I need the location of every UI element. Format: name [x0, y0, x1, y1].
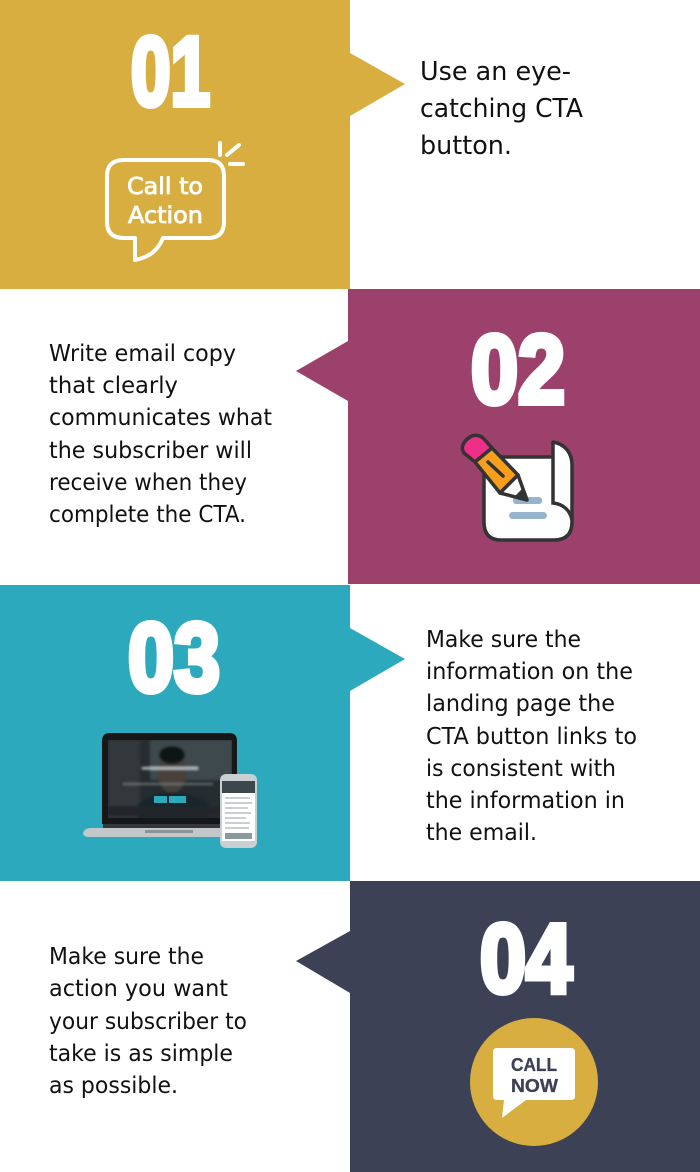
text: step 2 copy: the subscriber will	[49, 436, 252, 464]
text: step 3 copy	[426, 625, 637, 846]
panel background with pointer	[296, 289, 700, 584]
panel background with pointer	[0, 585, 405, 881]
text: step 3 copy: CTA button links to	[426, 722, 637, 750]
icon: call now badge	[470, 1018, 598, 1146]
text: step 3 copy: the information in	[426, 786, 625, 814]
text: step 1 copy: Use an eye-	[420, 57, 571, 87]
icon: call to action speech bubble: Call to	[127, 174, 203, 200]
icon: call now badge: CALL	[511, 1055, 557, 1075]
text: step 3 copy: Make sure the	[426, 625, 581, 653]
text: step 3 copy: the email.	[426, 818, 537, 846]
text: step 4 copy	[49, 942, 247, 1099]
text: step 2 copy: Write email copy	[49, 339, 236, 367]
panel background with pointer	[296, 881, 700, 1172]
number 03: 03	[128, 603, 220, 712]
panel: step 3	[0, 585, 637, 881]
icon: laptop and phone showing landing page	[83, 733, 257, 848]
text: step 2 copy: communicates what	[49, 403, 272, 431]
text: step 4 copy: take is as simple	[49, 1039, 233, 1067]
icon: call now badge: NOW	[511, 1076, 558, 1096]
panel background with pointer	[0, 0, 405, 289]
panel: step 4	[49, 881, 700, 1172]
number 04: 04	[480, 904, 572, 1013]
panel: step 2	[49, 289, 700, 584]
text: step 4 copy: Make sure the	[49, 942, 204, 970]
text: step 3 copy: landing page the	[426, 689, 615, 717]
number 01: 01	[131, 17, 210, 126]
number 02: 02	[471, 315, 565, 424]
icon: call to action speech bubble: Action	[128, 203, 203, 229]
panel: step 1	[0, 0, 583, 289]
text: step 2 copy: receive when they	[49, 468, 247, 496]
text: step 3 copy: information on the	[426, 657, 633, 685]
text: step 4 copy: action you want	[49, 974, 228, 1002]
text: step 1 copy: button.	[420, 131, 512, 161]
text: step 1 copy: catching CTA	[420, 94, 583, 124]
text: step 1 copy	[420, 57, 583, 161]
text: step 2 copy	[49, 339, 272, 528]
text: step 3 copy: is consistent with	[426, 754, 616, 782]
text: step 2 copy: complete the CTA.	[49, 500, 246, 528]
text: step 2 copy: that clearly	[49, 371, 178, 399]
text: step 4 copy: as possible.	[49, 1071, 178, 1099]
text: step 4 copy: your subscriber to	[49, 1007, 247, 1035]
icon: call to action speech bubble	[107, 143, 243, 260]
icon: pencil and paper	[462, 435, 572, 540]
